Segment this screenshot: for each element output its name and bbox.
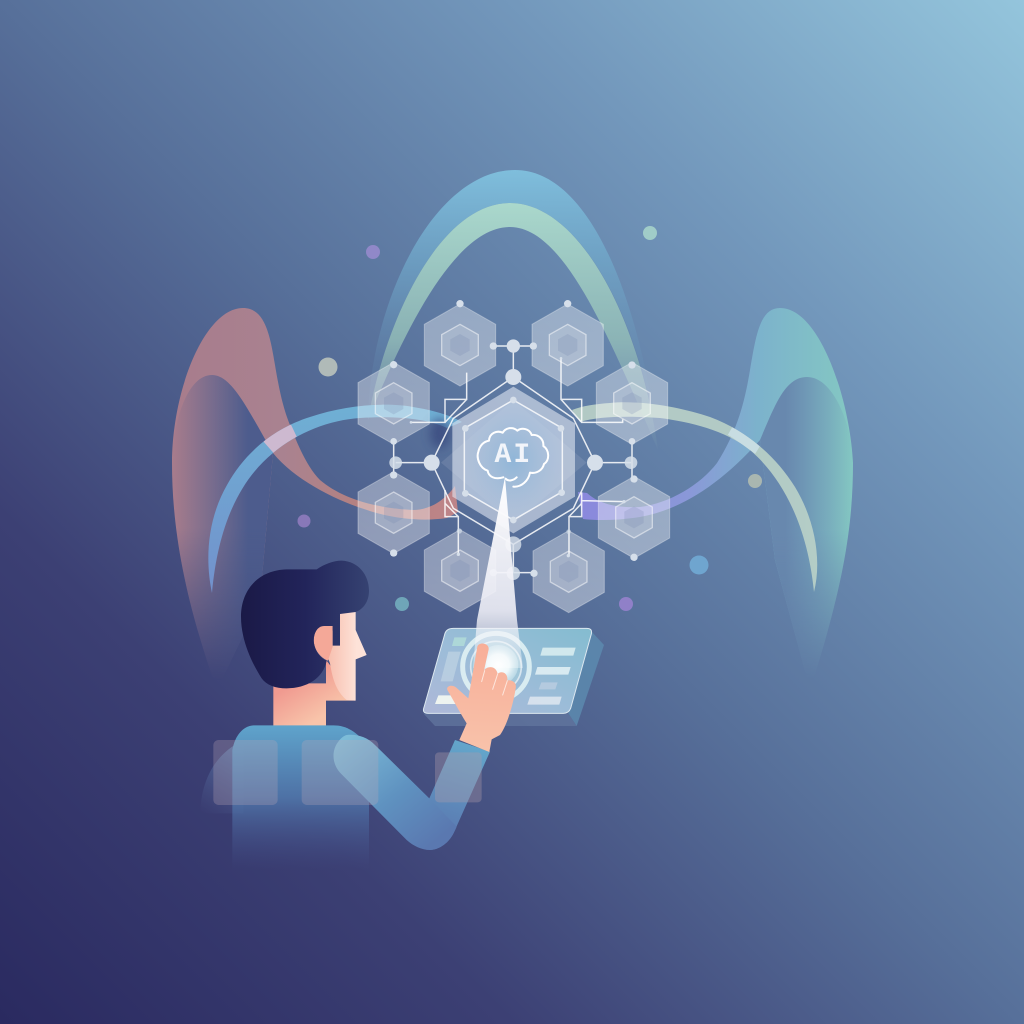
upper arm (334, 735, 457, 850)
person with touch panel (200, 561, 604, 870)
face (325, 611, 367, 701)
panel side depth (568, 632, 604, 726)
hand (447, 644, 516, 752)
shoulder fade (200, 740, 243, 813)
circuit lines (394, 346, 632, 573)
hexagon: lower left (358, 472, 429, 554)
hexagon: bottom right (533, 531, 604, 613)
hexagon: bottom left (424, 530, 496, 612)
left wing inner shade (179, 375, 273, 662)
translucent card: left (213, 740, 278, 805)
top arc: green (368, 203, 658, 450)
touch glow (478, 645, 518, 685)
floating dot: mint top-right (643, 226, 657, 240)
hexagon: top left (424, 304, 496, 386)
torso (232, 725, 369, 870)
hexagon: upper left (358, 362, 429, 444)
translucent card: center (302, 740, 378, 805)
forearm (400, 740, 490, 850)
light beam from finger to AI (473, 477, 523, 668)
finger gaps (482, 671, 507, 695)
top arc: blue (368, 170, 658, 445)
crossing highlight: left (264, 424, 297, 453)
icon: brain outline (478, 428, 548, 487)
left arc: blue (208, 405, 462, 593)
brain label: AI (495, 440, 532, 471)
floating dot: purple lower-right (619, 597, 633, 611)
hair (241, 561, 369, 688)
floating dot: grey-green right (748, 474, 762, 488)
shadow beside core (430, 418, 450, 448)
panel widgets (435, 637, 576, 705)
floating dot: blue right (690, 556, 708, 574)
translucent card: right (435, 752, 482, 802)
panel screen (423, 628, 592, 713)
right wing ribbon: teal to purple (578, 308, 853, 648)
right arc: green (572, 402, 817, 592)
AI hexagon network (358, 300, 670, 613)
touch ring (463, 633, 529, 700)
floating dot: grey-green left (318, 358, 338, 376)
core hexagon outer (452, 387, 575, 533)
floating dot: teal lower-left (395, 597, 409, 611)
crossing highlight: right (728, 427, 760, 454)
core hexagon inner (464, 400, 562, 520)
floating dot: purple top-left (366, 245, 380, 259)
hexagon: top right (532, 304, 603, 386)
floating dot: purple left (298, 514, 310, 528)
network nodes (389, 300, 638, 580)
hexagon: lower right (598, 476, 670, 558)
panel bottom depth (423, 713, 577, 726)
neck (273, 660, 355, 727)
ear (314, 625, 333, 661)
octagon frame (432, 377, 595, 544)
hexagon: upper right (596, 362, 668, 444)
core faint diamond (441, 400, 587, 523)
touch inner ring (471, 641, 521, 692)
left wing ribbon: red (172, 308, 458, 690)
right wing inner shade (760, 377, 844, 650)
hand shape (447, 644, 516, 752)
